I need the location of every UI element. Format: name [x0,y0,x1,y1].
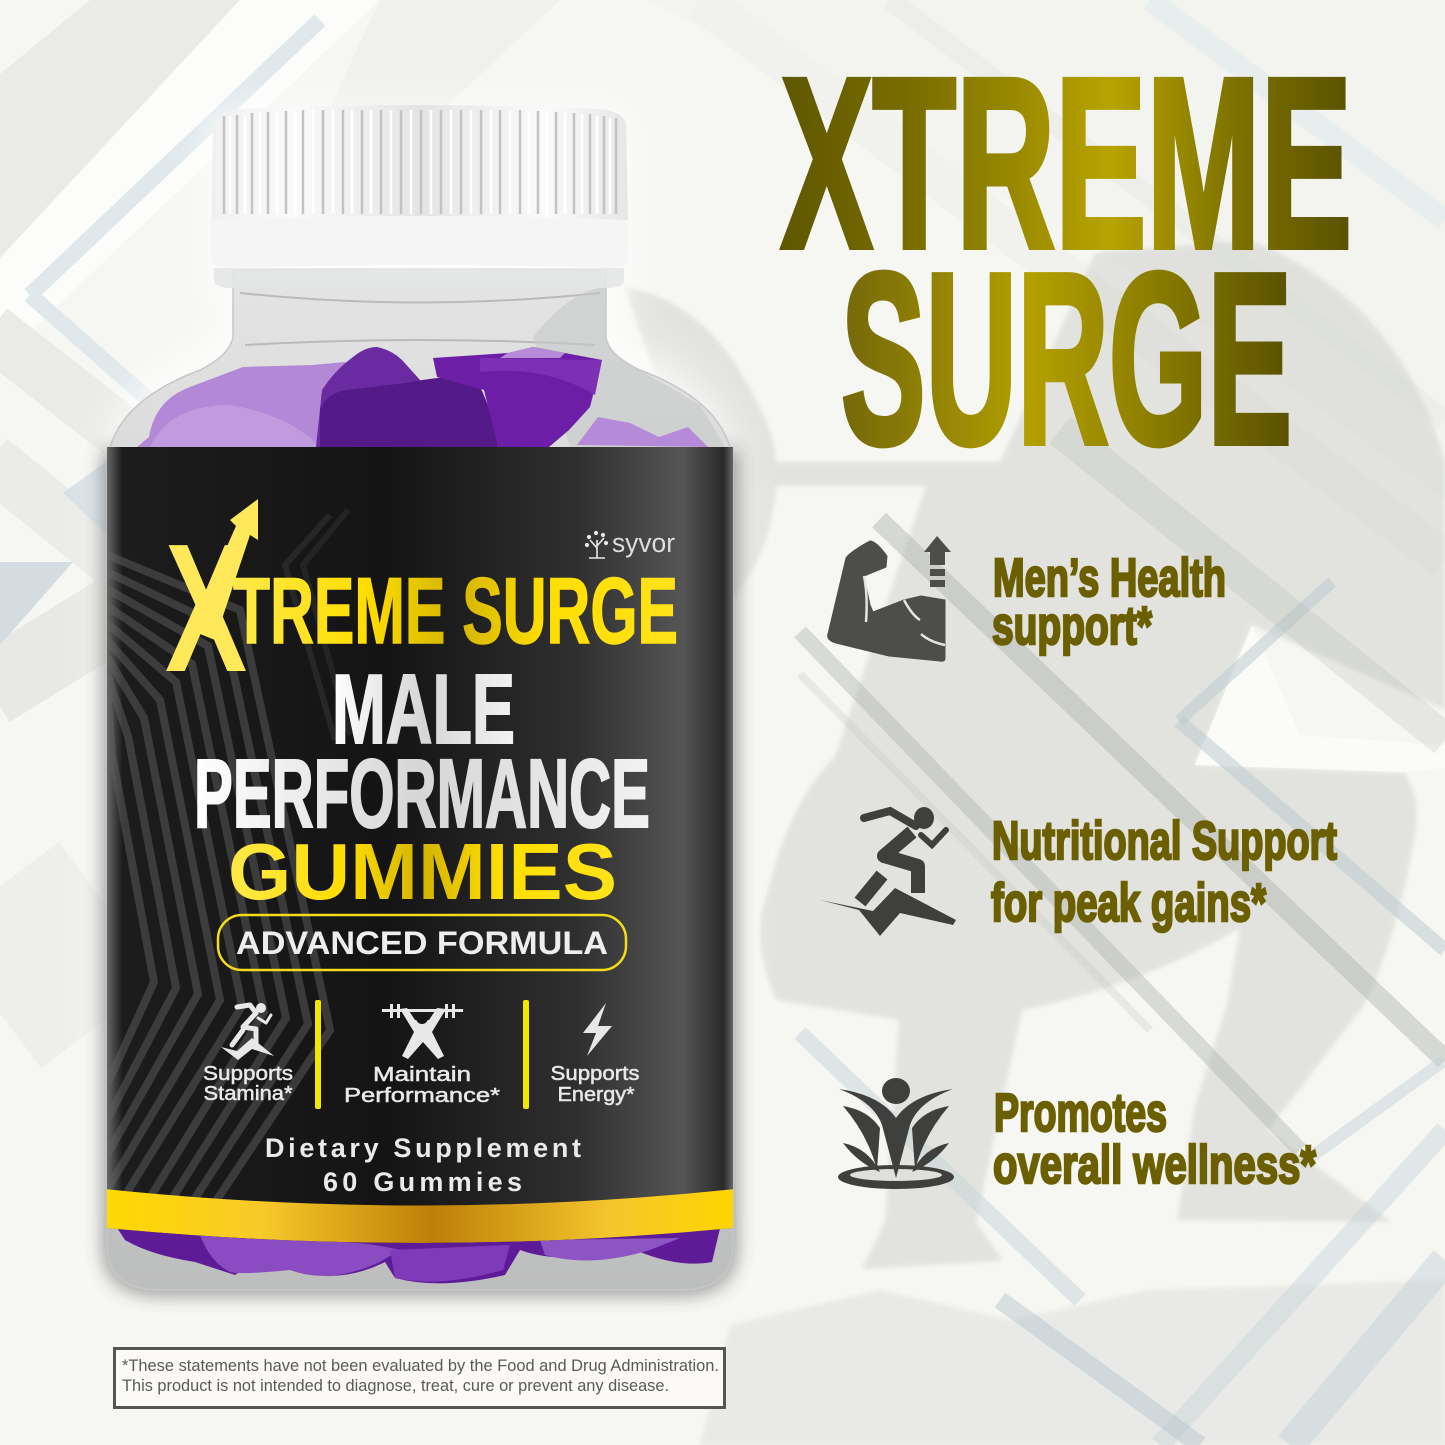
supplement facts [265,1133,581,1197]
yellow band [105,1189,735,1243]
disclaimer box [114,1348,724,1408]
text: nutritional support [991,811,1337,933]
divider [315,1000,321,1109]
diagonal bands over silhouette [800,430,1445,1445]
benefit 2 [820,807,1337,936]
benefit 1 [828,536,1226,661]
text: promotes wellness: overall wellness* [993,1135,1316,1195]
cap [211,105,628,268]
label chevron pattern [107,510,350,1240]
text: men's health: support* [992,596,1152,656]
brand name: syvor: syvor [612,528,675,558]
heading: male performance [194,654,650,848]
heading: male performance: PERFORMANCE [194,739,650,848]
label benefit: energy: Energy* [558,1084,635,1106]
label benefit: energy: Supports [550,1063,640,1085]
silhouette of athlete [625,240,1445,1445]
product name: TREME SURGE [233,558,678,663]
icon: rising arrow [190,499,258,640]
disclaimer box: This product is not intended to diagnose, treat, cure or prevent any disease. [122,1376,669,1395]
brand name: syvor [585,528,675,558]
icon: wellness figure [838,1078,954,1189]
bottle shoulder shade [533,287,725,447]
neck ring [214,268,624,288]
product name [165,499,678,710]
bottle shadow [102,450,738,1296]
heading: gummies: GUMMIES [228,827,617,916]
heading: male performance: MALE [332,654,515,764]
icon: runner [221,1003,274,1060]
gummies bottom [112,1220,722,1283]
cap ridges [224,110,616,214]
divider [523,1000,529,1109]
badge: advanced formula [218,915,626,970]
icon: lightning bolt [583,1003,612,1056]
neck highlights [240,293,600,345]
label benefit: energy [550,1003,640,1106]
icon: sprinter [820,807,956,936]
benefit 3 [838,1078,1316,1195]
label benefit: stamina: Supports [203,1063,293,1085]
text: nutritional support: for peak gains* [991,873,1266,933]
label [105,447,735,1247]
supplement facts: 60 Gummies [323,1167,522,1197]
disclaimer box: *These statements have not been evaluated by the Food and Drug Administration. [122,1356,719,1375]
label benefit: performance: Maintain [373,1064,471,1086]
text: men's health [992,548,1226,656]
bottle glow [107,110,733,1290]
title [781,28,1352,495]
bright gap by the right knee [1195,625,1445,772]
glass body [107,270,733,1290]
label benefit: stamina: Stamina* [204,1083,293,1105]
label benefit: stamina [203,1003,293,1105]
icon: weightlifter [382,1004,463,1059]
supplement facts: Dietary Supplement [265,1133,581,1163]
label benefit: performance: Performance* [344,1085,500,1107]
icon: tree [585,531,608,558]
text: promotes wellness [993,1083,1316,1195]
product name: X [165,505,247,710]
text: men's health: Men’s Health [993,548,1226,608]
icon: muscle arm [828,536,951,661]
text: promotes wellness: Promotes [994,1083,1167,1143]
badge: advanced formula: ADVANCED FORMULA [236,925,608,961]
bottle [102,105,738,1296]
gummies top [137,347,708,447]
label benefit: performance [344,1004,500,1107]
